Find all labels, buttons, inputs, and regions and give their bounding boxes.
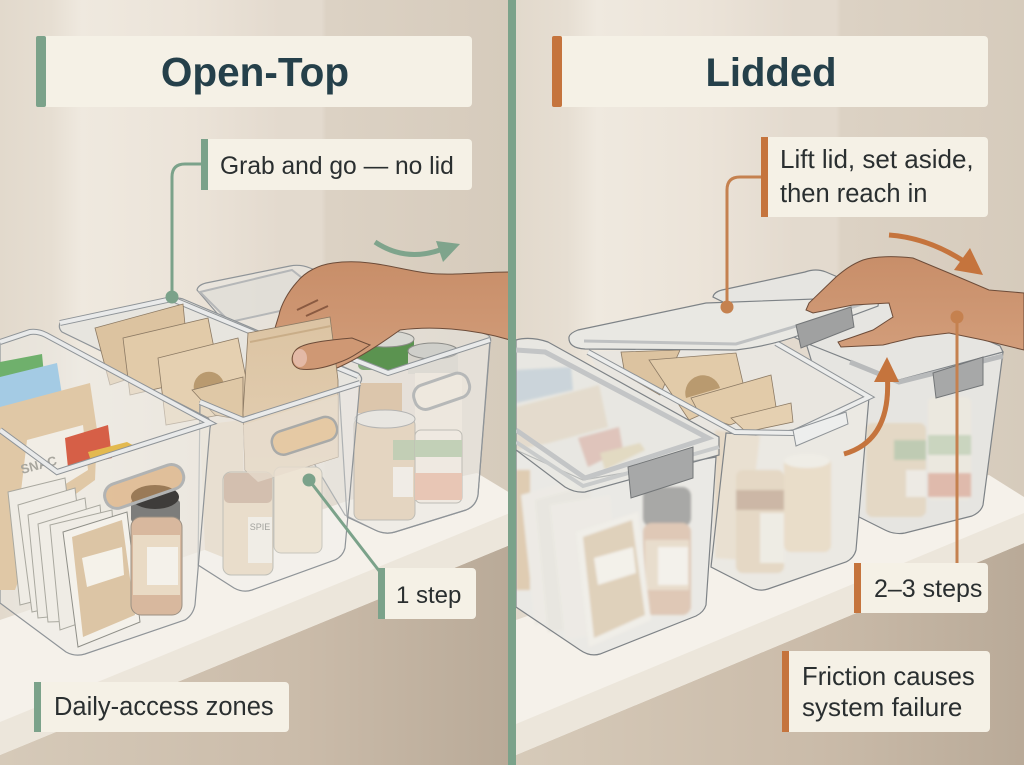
stack: pale containers	[415, 373, 462, 433]
hand: open-top palm and arm	[275, 262, 510, 368]
callout: grab and go: Grab and go — no lid	[220, 153, 454, 180]
handle cutout	[411, 370, 473, 412]
frosted face	[516, 450, 716, 655]
arrow: lid lift right	[889, 235, 983, 275]
bin: lidded front	[516, 338, 719, 655]
arrow: open-top motion	[375, 241, 460, 262]
title: Open-Top: Open-Top	[161, 49, 349, 95]
can: green	[358, 331, 414, 370]
bin: open-top middle back and contents	[59, 298, 362, 425]
pouch: back 1	[95, 304, 186, 385]
pouch: back 4	[192, 377, 243, 420]
hand: lidded	[806, 257, 1024, 350]
connector: grab and go	[166, 164, 203, 304]
contents lidded middle	[715, 430, 831, 573]
connector: 1 step	[302, 474, 380, 572]
pouch: back 3	[158, 338, 246, 425]
arrow: lid lift up	[844, 357, 899, 454]
jar: upper tan behind	[358, 383, 402, 413]
rim	[588, 343, 869, 433]
sachets	[8, 478, 140, 647]
jars lidded back	[866, 397, 971, 517]
callout: friction	[782, 651, 990, 732]
lid: front	[516, 338, 719, 492]
front glass	[337, 340, 490, 533]
jar: spice: SPIE	[250, 522, 270, 532]
callout: friction: system failure	[802, 692, 962, 722]
shelf: lidded	[516, 475, 1024, 755]
hand: thumb	[292, 338, 370, 369]
sachet lidded	[576, 512, 651, 647]
rim	[337, 340, 490, 373]
shelf: open-top	[0, 473, 510, 755]
pouches lidded	[621, 350, 793, 432]
divider	[508, 0, 516, 765]
jar: beige	[274, 467, 322, 553]
latch	[933, 357, 983, 398]
snack packets	[0, 354, 138, 590]
connector: lift lid	[720, 177, 763, 314]
pouch: held by hand	[243, 300, 338, 482]
pouch: faint lower	[200, 420, 243, 558]
pouch panel through glass	[243, 395, 338, 482]
latch: front	[628, 447, 693, 498]
bin: open-top back	[197, 265, 491, 533]
callout: lift lid: Lift lid, set aside,	[780, 144, 974, 174]
rim	[0, 332, 210, 472]
callout: grab and go	[201, 139, 472, 190]
jar: spice	[223, 472, 273, 575]
frosted face	[806, 343, 1003, 534]
title: Open-Top	[36, 36, 472, 107]
can: silver	[408, 343, 458, 374]
callout: 1 step	[378, 568, 476, 619]
spice jar	[131, 485, 182, 615]
snack packets: SNAC	[19, 453, 59, 477]
callout: daily-access zones	[34, 682, 289, 732]
bin: open-top middle front face	[198, 383, 360, 591]
clip	[793, 412, 848, 446]
pouch: back 2	[123, 318, 216, 395]
callout: daily-access zones: Daily-access zones	[54, 693, 274, 721]
handle cutout	[101, 461, 187, 512]
contents lidded front	[516, 367, 691, 640]
rim	[200, 383, 360, 420]
rim band	[850, 356, 1003, 382]
callout: lift lid	[761, 137, 988, 217]
lid: lifted	[569, 297, 878, 350]
callout: 2-3 steps: 2–3 steps	[874, 575, 982, 603]
callout: 1 step: 1 step	[396, 582, 461, 609]
jar: striped	[415, 430, 462, 503]
callout: 2-3 steps	[854, 563, 988, 613]
panel: open-top background	[0, 0, 510, 765]
handle cutout	[269, 414, 340, 458]
callout: lift lid: then reach in	[780, 180, 927, 208]
callout: friction: Friction causes	[802, 663, 975, 691]
bin: open-top front	[0, 332, 211, 655]
bin: lidded middle	[588, 343, 869, 590]
connector: 2-3 steps	[950, 310, 964, 564]
title: Lidded	[552, 36, 988, 107]
panel: lidded background	[516, 0, 1024, 765]
back lid top	[713, 270, 1003, 380]
glass	[198, 383, 360, 591]
jar: large beige	[354, 410, 415, 520]
frosted face	[711, 397, 869, 590]
label circle	[194, 372, 224, 390]
title: Lidded: Lidded	[705, 51, 837, 95]
bin: lidded back	[713, 270, 1003, 534]
